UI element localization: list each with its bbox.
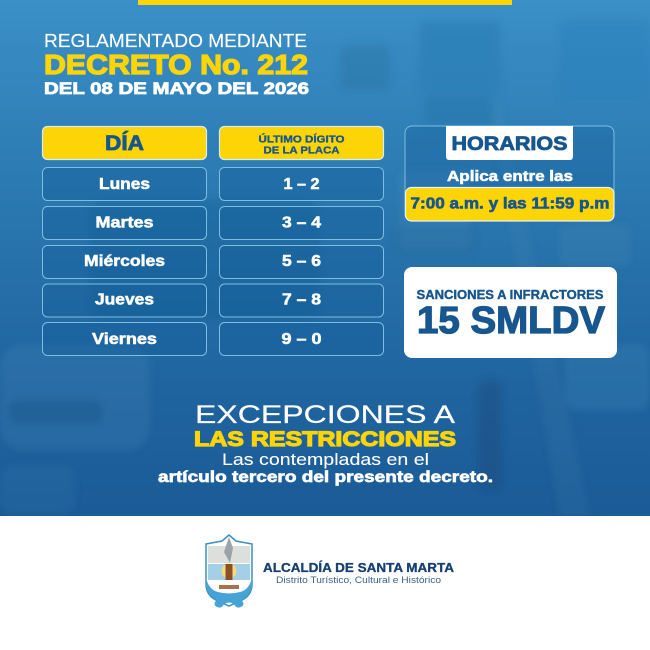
row: lunes: Lunes [99,176,150,193]
sanciones amount: 15 SMLDV [417,300,606,342]
row: viernes [42,322,384,356]
footer white band [0,516,650,650]
aplica text: Aplica entre las [447,168,573,185]
row: martes [42,206,384,240]
row: lunes [42,168,384,200]
background: blue traffic scene [0,0,650,517]
row: martes: Martes [96,214,154,232]
time range: 7:00 a.m. y las 11:59 p.m [410,196,610,212]
sanciones label: SANCIONES A INFRACTORES [416,288,604,302]
top yellow bar [138,0,512,5]
row: viernes: 9 – 0 [282,331,322,348]
row: martes: 3 – 4 [282,214,321,232]
logo: Santa Marta shield [206,535,252,608]
body line 1: Las contempladas en el [222,450,429,469]
time range [406,188,614,221]
heading line: date: DEL 08 DE MAYO DEL 2026 [44,79,309,98]
restricciones heading: LAS RESTRICCIONES [194,428,456,451]
row: viernes: Viernes [92,331,157,348]
tagline: Distrito Turístico, Cultural e Histórico [276,575,441,586]
row: jueves [42,284,384,317]
text block: excepciones [158,401,493,486]
body line 2: artículo tercero del presente decreto. [158,469,493,486]
column header: último dígito: DE LA PLACA [264,144,340,156]
column header: último dígito [220,126,384,160]
panel: sanciones [404,267,617,358]
horarios tab: HORARIOS [452,133,568,155]
heading: decree [44,31,309,98]
excepciones heading: EXCEPCIONES A [195,401,455,429]
row: lunes: 1 – 2 [284,176,320,193]
row: miércoles: Miércoles [84,253,165,270]
row: miércoles: 5 – 6 [282,253,321,270]
column header: último dígito: ÚLTIMO DÍGITO [258,132,344,146]
logo text [263,560,454,586]
panel: horarios [405,126,614,221]
column header: día: DÍA [105,132,144,155]
table: day and plate digit [42,126,384,356]
row: miércoles [42,246,384,278]
horarios tab [446,126,573,160]
heading line: decreto number: DECRETO No. 212 [44,49,308,80]
row: jueves: 7 – 8 [282,292,321,308]
heading line: reglamentado: REGLAMENTADO MEDIANTE [44,31,307,51]
column header: día [42,126,206,160]
organisation name: ALCALDÍA DE SANTA MARTA [263,560,454,575]
row: jueves: Jueves [95,292,154,308]
